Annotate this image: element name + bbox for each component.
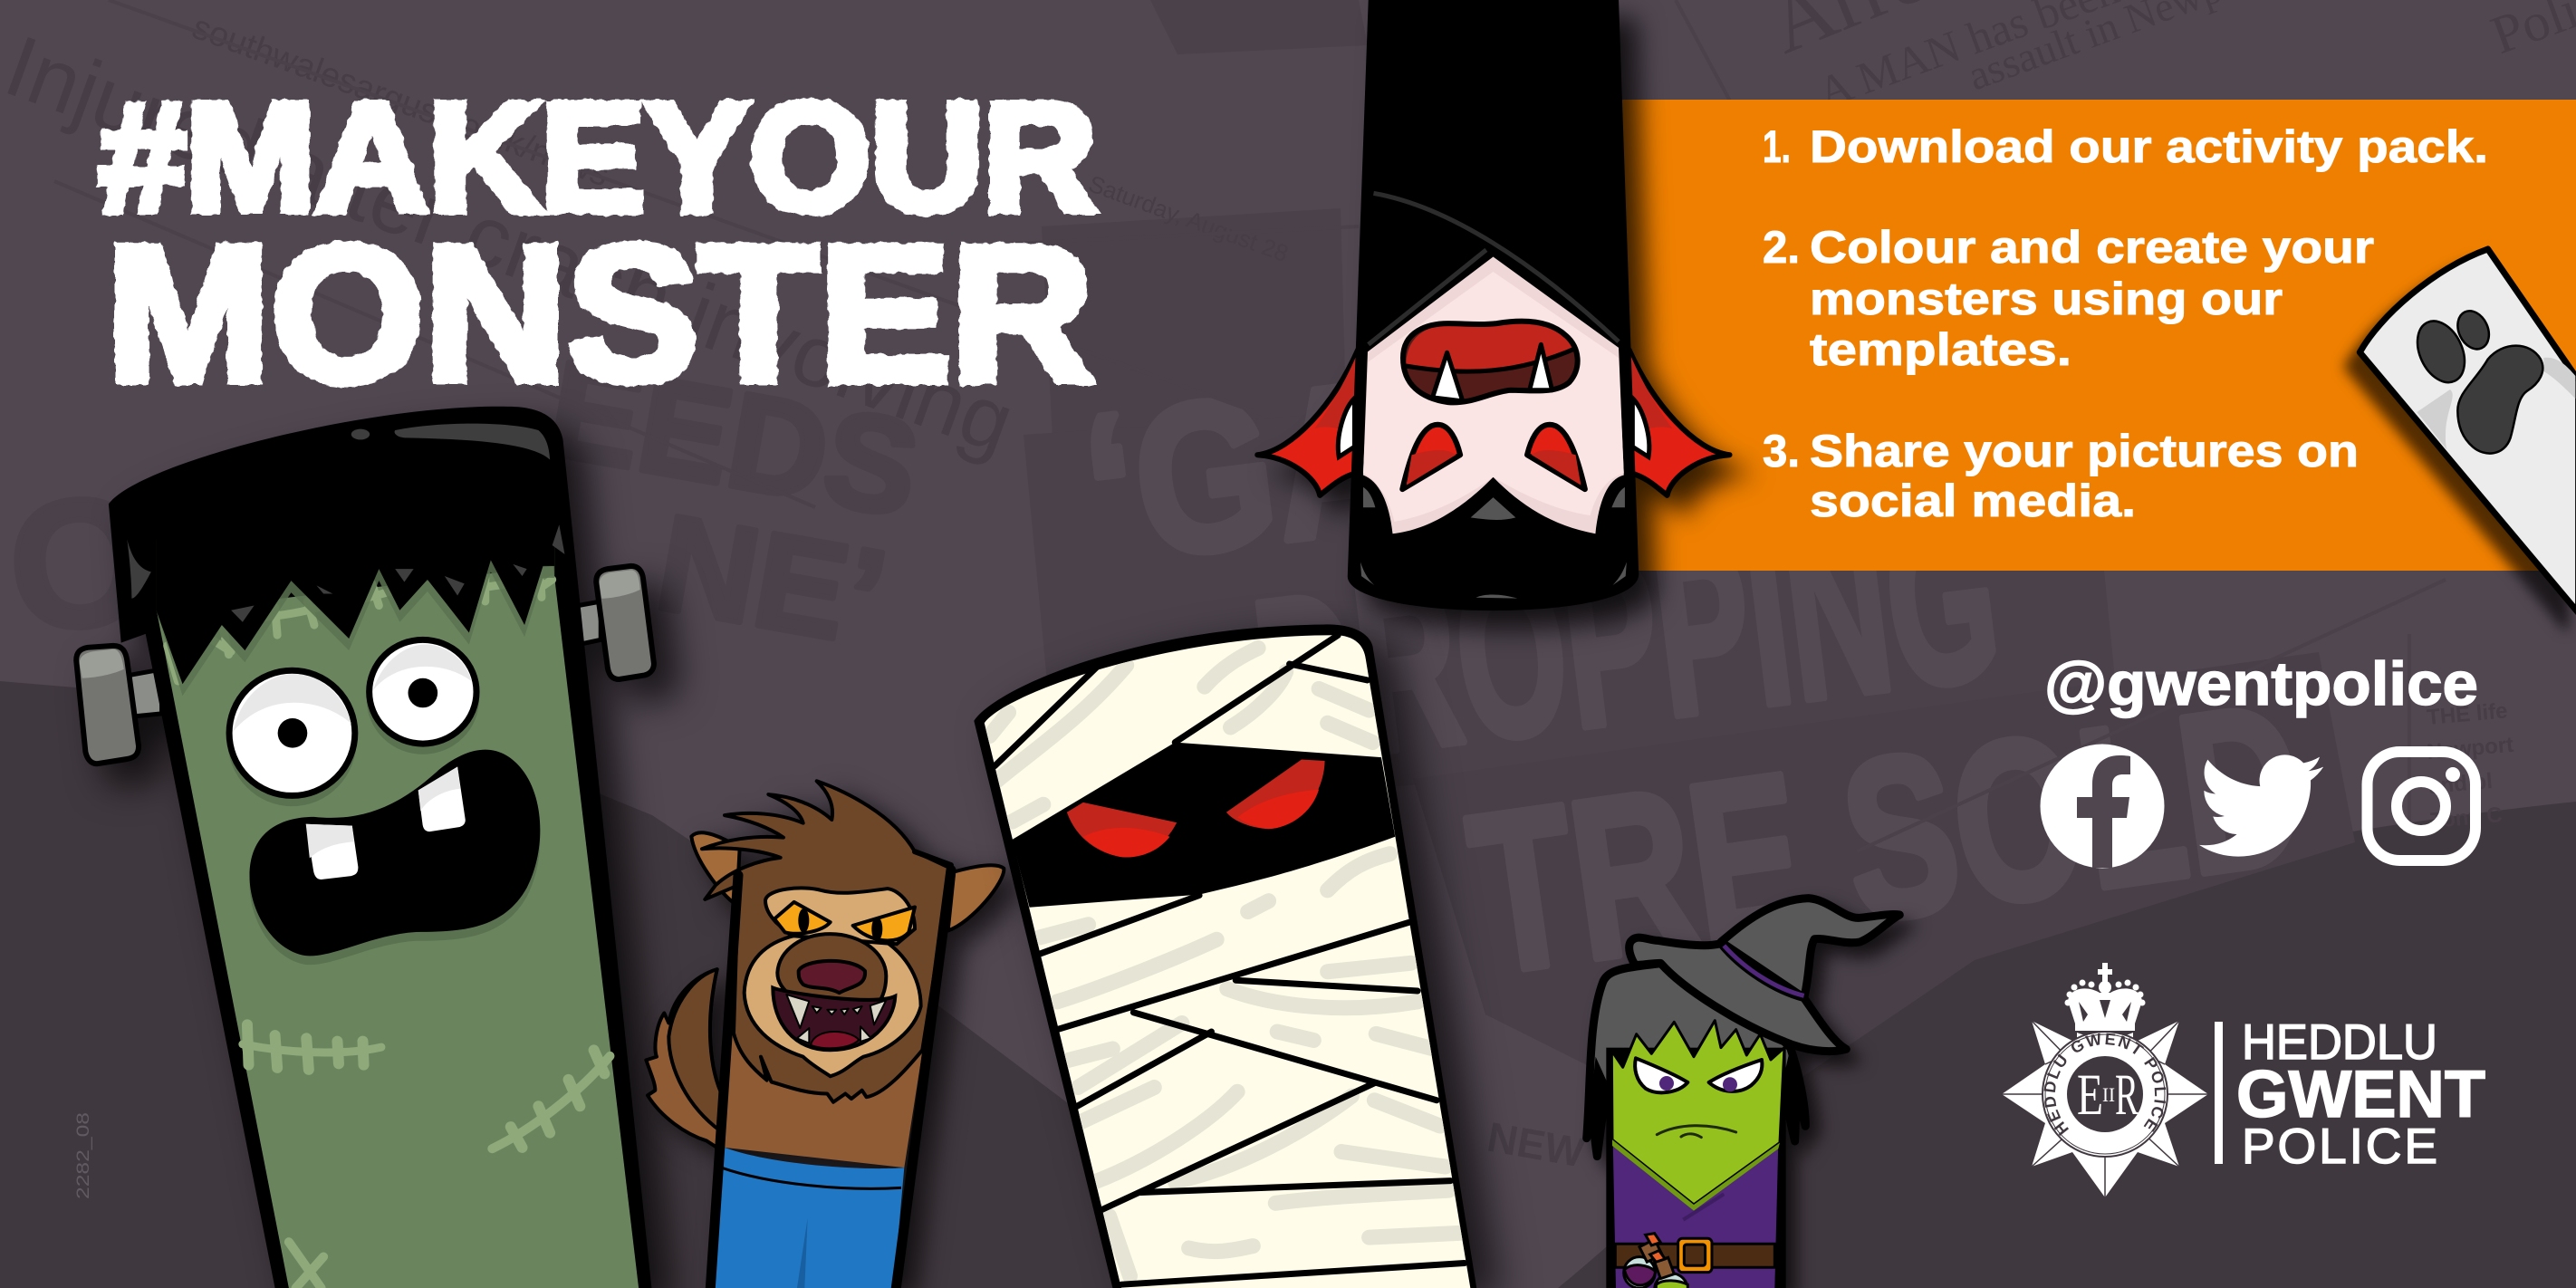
black eye slit	[1012, 743, 1395, 908]
witch hair strands	[1587, 1048, 1805, 1157]
hair shadow	[156, 540, 554, 696]
character: ghost paw	[2360, 249, 2576, 613]
werewolf nose	[799, 961, 865, 993]
werewolf muzzle	[745, 936, 921, 1076]
background: lighter newspaper collage: THE life	[2426, 698, 2509, 730]
background: lighter newspaper collage: DROPPING	[1242, 465, 2012, 816]
witch frown	[1657, 1126, 1736, 1138]
background: lighter newspaper collage: southwalesargus.co.uk/news	[187, 8, 614, 195]
hair highlights	[127, 424, 564, 622]
crest crown	[2065, 963, 2145, 1038]
werewolf eyes	[774, 902, 915, 941]
step 1 text: Download our activity pack.	[1810, 121, 2488, 172]
title: #MAKEYOUR MONSTER	[99, 72, 1096, 422]
werewolf mouth	[773, 988, 895, 1050]
step 2 text: templates.	[1810, 324, 2071, 375]
bandage lines	[995, 635, 1465, 1284]
witch hair back	[1587, 963, 1805, 1157]
left eye	[227, 670, 357, 806]
character: frankenstein monster	[76, 407, 654, 1288]
werewolf side outlines	[710, 851, 951, 1288]
ghost mouth	[2457, 346, 2542, 454]
logo: divider bar	[2215, 1022, 2223, 1164]
background: lighter newspaper collage: Injured after crash involving	[0, 17, 1026, 472]
ghost body	[2360, 249, 2576, 613]
witch belt and buckle	[1615, 1238, 1774, 1273]
werewolf body	[725, 869, 951, 1168]
step 2 text: 2.	[1763, 222, 1800, 273]
step 2 text: monsters using our	[1810, 274, 2283, 324]
scars	[243, 1024, 610, 1288]
mummy bandage fill	[985, 635, 1470, 1288]
crest cypher EIIR	[2077, 1062, 2139, 1128]
logo: Gwent Police crest	[2002, 963, 2207, 1197]
bandage smudges	[990, 648, 1459, 1276]
icon: instagram	[2368, 752, 2475, 860]
background: lighter newspaper collage: Tony C	[2429, 803, 2504, 833]
crest cypher EIIR: II	[2102, 1083, 2115, 1106]
icon: twitter	[2199, 755, 2323, 857]
character: werewolf	[646, 781, 1004, 1288]
step 3 text: 3.	[1763, 426, 1800, 476]
step 3 text: social media.	[1810, 476, 2136, 526]
crest cypher EIIR: E	[2077, 1062, 2103, 1128]
werewolf ears	[691, 832, 1004, 930]
witch face	[1611, 1021, 1784, 1205]
panel: orange instructions	[1621, 100, 2576, 571]
right eye	[367, 639, 479, 755]
icon: facebook	[2040, 745, 2165, 868]
logo: wordmark: HEDDLU	[2242, 1014, 2437, 1070]
witch eyes	[1635, 1058, 1762, 1092]
character: mummy	[974, 624, 1476, 1288]
witch potion bottles	[1624, 1234, 1687, 1288]
title: #MAKEYOUR MONSTER: #MAKEYOUR	[99, 72, 1096, 244]
logo: wordmark	[2236, 1014, 2485, 1174]
vampire face	[1363, 256, 1624, 533]
background: lighter newspaper collage: NE’	[647, 485, 897, 675]
vampire mouth	[1403, 322, 1578, 402]
step 3 text	[1763, 426, 2359, 526]
witch body outline	[1606, 1048, 1786, 1288]
forehead stitches	[168, 578, 553, 681]
print reference code: 2282_08	[74, 1112, 93, 1199]
logo: wordmark: POLICE	[2242, 1118, 2437, 1174]
vampire wings	[1257, 350, 1730, 495]
witch hat	[1629, 899, 1899, 1052]
vampire hairline	[1369, 193, 1619, 344]
step 2 text: Colour and create your	[1810, 222, 2374, 273]
background: lighter newspaper collage: NEW	[1484, 1113, 1589, 1177]
right neck bolt	[569, 566, 654, 679]
crest cypher EIIR: R	[2115, 1062, 2139, 1128]
logo: wordmark: GWENT	[2236, 1058, 2485, 1131]
step 3 text: Share your pictures on	[1810, 426, 2359, 476]
social handle: @gwentpolice	[2044, 649, 2478, 718]
mouth with teeth	[250, 750, 540, 965]
background: lighter newspaper collage: EEDS	[538, 332, 929, 545]
vampire eyes	[1402, 425, 1585, 489]
black hair	[156, 480, 554, 684]
werewolf brow mask	[765, 888, 915, 944]
crest ring with motto: HEDDLU GWENT POLICE	[2043, 1033, 2167, 1136]
werewolf head fur	[702, 781, 951, 1102]
ghost shading	[2417, 358, 2575, 450]
werewolf snout	[777, 934, 886, 1008]
mummy eyes	[1067, 760, 1325, 857]
character: vampire	[1257, 0, 1730, 610]
mummy outline	[974, 624, 1476, 1288]
character: witch	[1587, 899, 1899, 1288]
werewolf tail	[646, 969, 723, 1148]
vampire body	[1348, 0, 1639, 610]
werewolf trousers	[708, 1148, 904, 1288]
ghost eyes	[2408, 306, 2494, 390]
title: #MAKEYOUR MONSTER: MONSTER	[106, 206, 1093, 422]
step 1 text: 1.	[1763, 121, 1791, 172]
background: lighter newspaper collage: Newport	[2426, 733, 2514, 764]
crest star	[2002, 1021, 2208, 1197]
witch robe	[1613, 1139, 1778, 1288]
background: lighter newspaper collage: ‘GA	[1072, 336, 1416, 609]
left neck bolt	[76, 646, 162, 764]
head silhouette	[109, 407, 651, 1288]
vampire hair glints	[1360, 487, 1627, 599]
background: lighter newspaper collage: and pl	[2427, 769, 2494, 799]
background: lighter newspaper collage: Saturday, August 28	[1085, 169, 1292, 267]
green face	[157, 566, 639, 1288]
step 2 text	[1763, 222, 2374, 375]
